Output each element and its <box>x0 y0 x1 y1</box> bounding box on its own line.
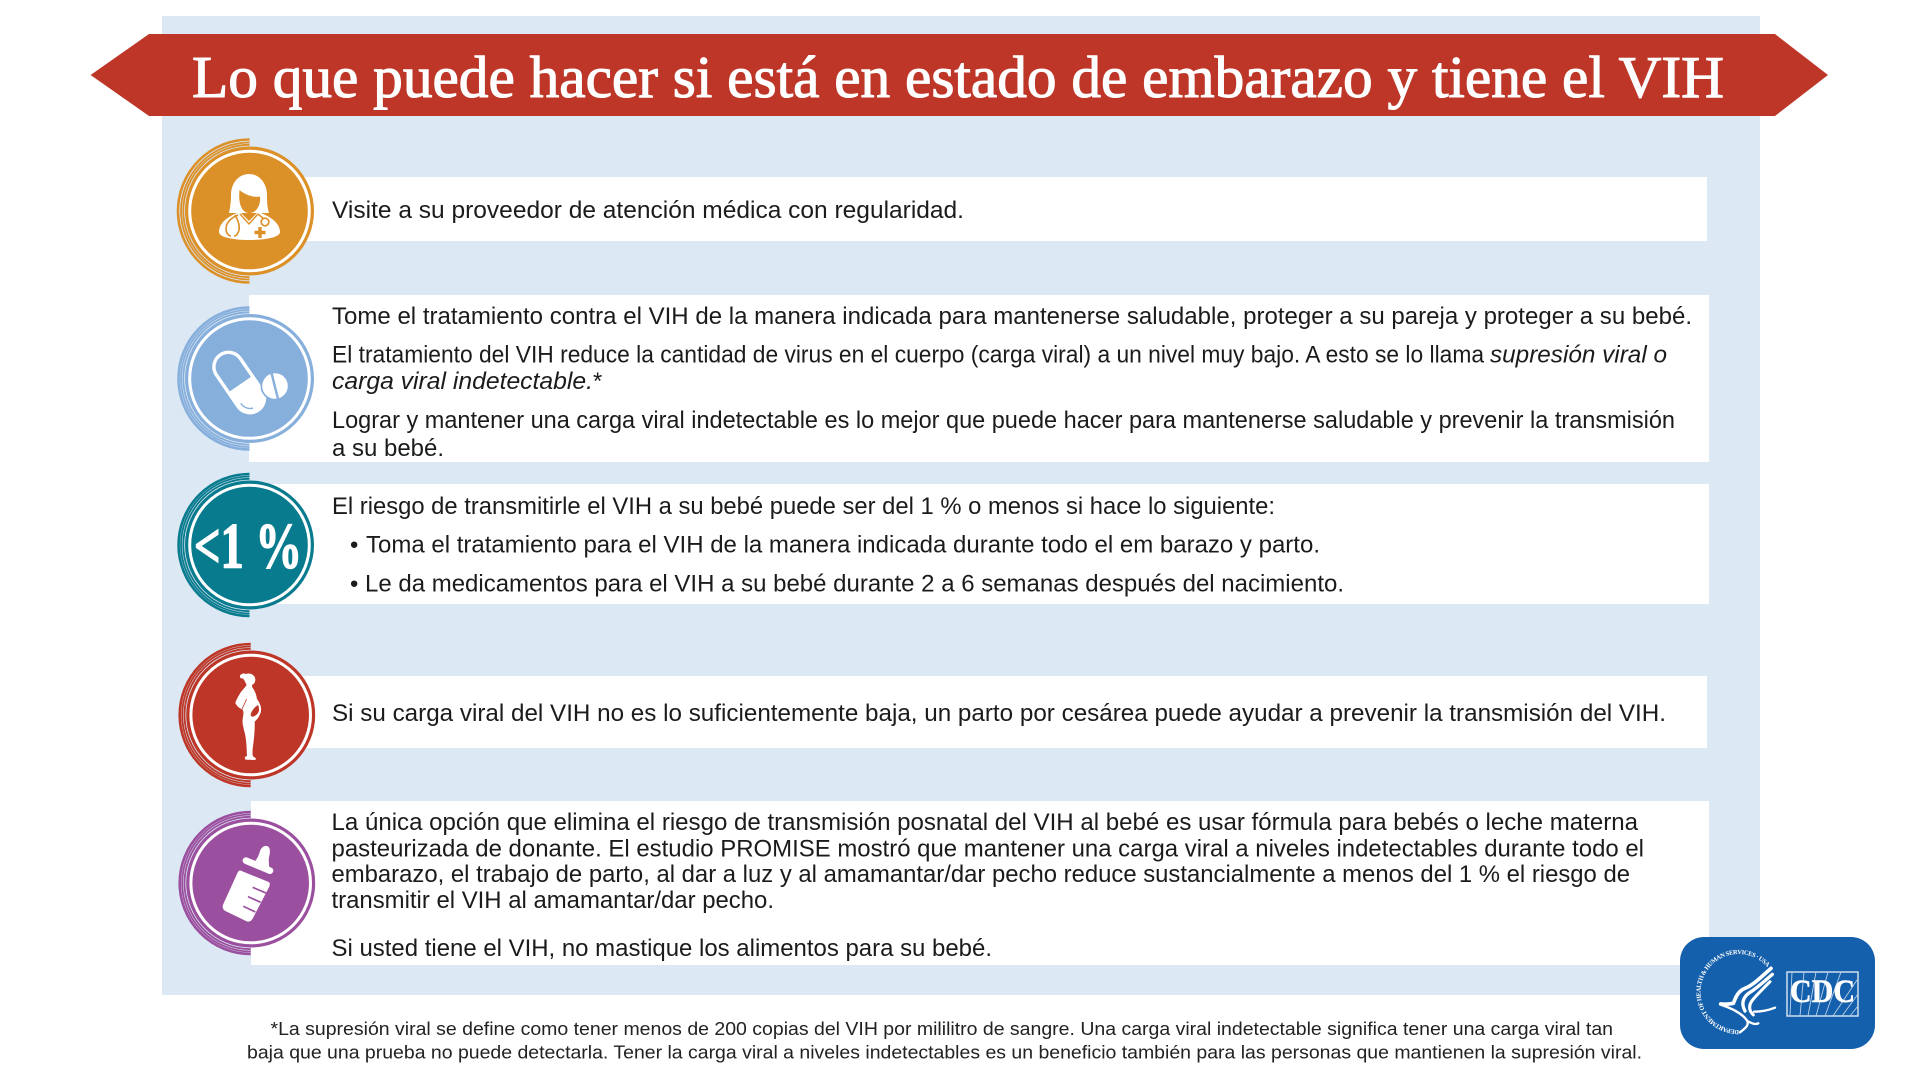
icon: baby bottle <box>180 812 315 954</box>
text: formula option line 4: transmitir el VIH al amamantar/dar pecho. <box>332 887 774 914</box>
HHS circular text: DEPARTMENT OF HEALTH & HUMAN SERVICES · USA <box>1696 950 1770 1034</box>
text: risk intro: El riesgo de transmitirle el VIH a su bebé puede ser del 1 % o menos si hace lo siguiente: <box>332 493 1275 520</box>
panel: row 3 risk <box>249 484 1709 604</box>
logo: HHS CDC badge <box>1680 937 1875 1049</box>
text: asterisk: * <box>593 368 602 395</box>
panel: row 5 infant feeding <box>251 801 1709 965</box>
panel: row 4 cesarean <box>250 676 1707 748</box>
text: undetectable italic: carga viral indetectable. <box>332 368 593 395</box>
text: achieving undetectable line 1: Lograr y mantener una carga viral indetectable es lo mejor que puede hacer para mantenerse saludable y prevenir la transmisión <box>332 407 1675 434</box>
footnote <box>247 1019 1642 1062</box>
text: bullet 1: • <box>350 532 358 559</box>
icon: less than 1 percent: <1 % <box>194 510 302 582</box>
text: achieving undetectable line 2: a su bebé. <box>332 435 444 462</box>
title: Lo que puede hacer si está en estado de embarazo y tiene el VIH <box>192 44 1724 110</box>
text: formula option line 1: La única opción que elimina el riesgo de transmisión posnatal del VIH al bebé es usar fórmula para bebés o leche materna <box>332 809 1639 836</box>
footnote line 1: *La supresión viral se define como tener menos de 200 copias del VIH por mililitro de sangre. Una carga viral indetectable significa tener una carga viral tan <box>270 1019 1613 1039</box>
panel: row 2 treatment <box>249 295 1709 462</box>
HHS eagle <box>1721 968 1775 1032</box>
footnote line 2: baja que una prueba no puede detectarla. Tener la carga viral a niveles indetectables es un beneficio también para las personas que mantienen la supresión viral. <box>247 1042 1642 1062</box>
icon: less than 1 percent <box>179 474 314 616</box>
panel: row 1 visit provider <box>249 177 1707 241</box>
text: bullet 2: • <box>350 571 358 598</box>
text: formula option line 2: pasteurizada de donante. El estudio PROMISE mostró que mantener una carga viral a niveles indetectables durante todo el <box>332 835 1644 862</box>
text: visit provider: Visite a su proveedor de atención médica con regularidad. <box>332 197 964 224</box>
text: treatment reduces virus: El tratamiento del VIH reduce la cantidad de virus en el cuerpo (carga viral) a un nivel muy bajo. A esto se lo llama <box>332 342 1485 369</box>
title banner <box>91 34 1828 116</box>
icon: doctor <box>178 140 314 282</box>
text: take treatment: Tome el tratamiento contra el VIH de la manera indicada para mantenerse saludable, proteger a su pareja y proteger a su bebé. <box>332 303 1692 330</box>
text: baby medication: Le da medicamentos para el VIH a su bebé durante 2 a 6 semanas después del nacimiento. <box>365 571 1344 598</box>
text: do not pre-chew: Si usted tiene el VIH, no mastique los alimentos para su bebé. <box>332 935 992 962</box>
icon: pregnant woman <box>180 644 315 786</box>
text: treatment during pregnancy: Toma el tratamiento para el VIH de la manera indicada durante todo el em barazo y parto. <box>366 532 1320 559</box>
text: cesarean: Si su carga viral del VIH no es lo suficientemente baja, un parto por cesárea puede ayudar a prevenir la transmisión del VIH. <box>332 700 1666 727</box>
CDC box: CDC <box>1790 974 1855 1010</box>
panel: light blue background <box>162 16 1760 995</box>
icon: pills <box>178 308 314 450</box>
text: viral suppression italic: supresión viral o <box>1490 342 1667 369</box>
text: formula option line 3: embarazo, el trabajo de parto, al dar a luz y al amamantar/dar pecho reduce sustancialmente a menos del 1 % el riesgo de <box>332 861 1630 888</box>
